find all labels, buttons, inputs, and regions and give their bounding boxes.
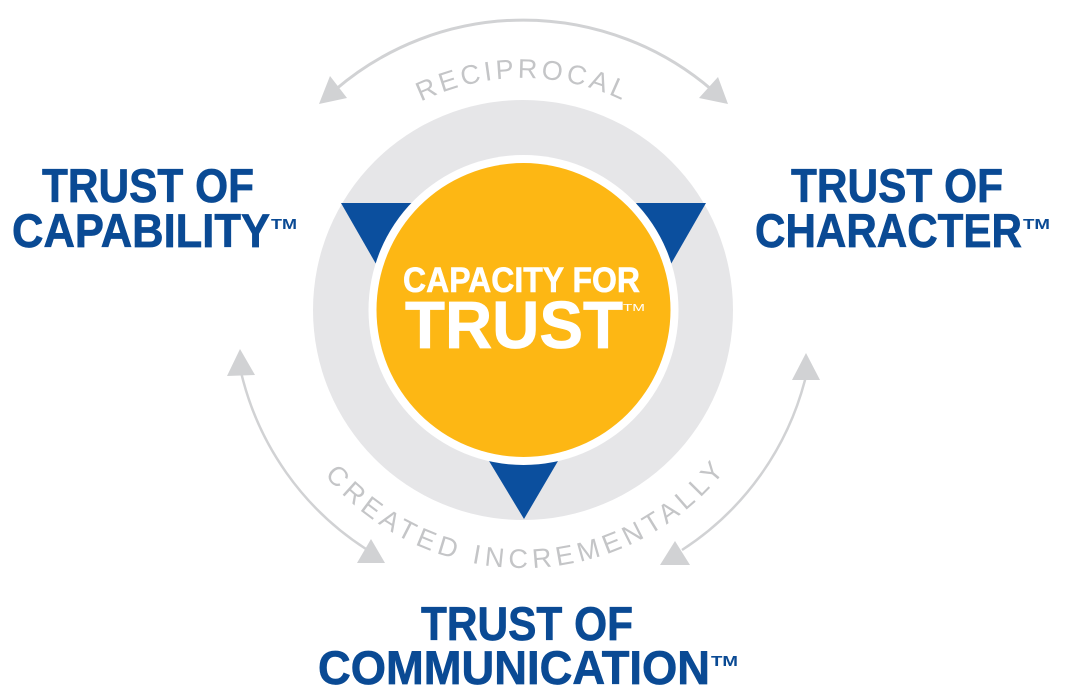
arrow: right lower [660, 353, 820, 565]
center label: capacity for trust: CAPACITY FOR [403, 261, 640, 300]
heading: trust of communication: TRUST OF [421, 597, 633, 650]
heading: trust of character: TRUST OF [791, 159, 1003, 212]
triangle: top left [341, 203, 412, 264]
arrow: left lower [227, 349, 385, 563]
heading: trust of communication [318, 597, 738, 694]
heading: trust of capability [12, 159, 297, 257]
white ring [368, 155, 678, 465]
central yellow circle [376, 163, 670, 457]
heading: trust of capability: CAPABILITY [12, 204, 270, 257]
curved label: reciprocal: RECIPROCAL [416, 59, 622, 100]
heading: trust of communication: TM [711, 653, 738, 670]
heading: trust of character [755, 159, 1050, 257]
heading: trust of capability: TRUST OF [42, 159, 254, 212]
outer gray circle [313, 100, 733, 520]
center label: capacity for trust [403, 261, 645, 363]
triangle: bottom [489, 461, 558, 519]
heading: trust of character: CHARACTER [755, 204, 1022, 257]
center label: capacity for trust: TM [623, 303, 645, 314]
heading: trust of communication: COMMUNICATION [318, 641, 710, 694]
curved label: created incrementally: CREATED INCREMENTALLY [328, 460, 720, 568]
center label: capacity for trust: TRUST [405, 288, 623, 363]
arrow: reciprocal top [319, 20, 728, 104]
triangle: top right [636, 203, 706, 264]
heading: trust of capability: TM [271, 216, 297, 233]
heading: trust of character: TM [1023, 216, 1050, 233]
